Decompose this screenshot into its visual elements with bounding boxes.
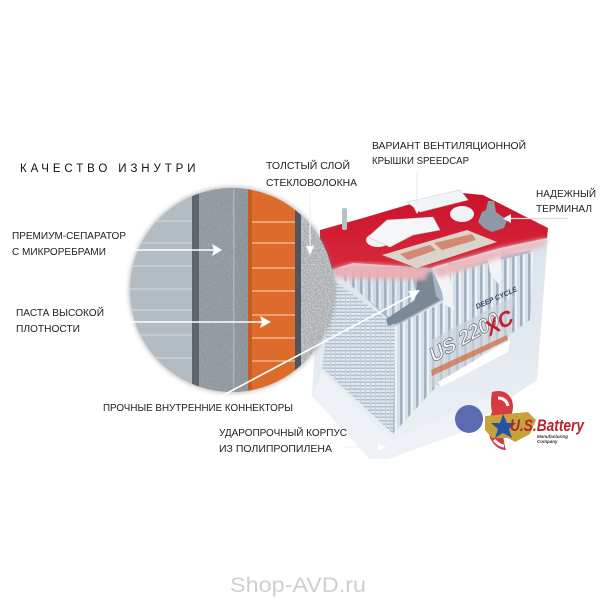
vent cap SpeedCap	[366, 190, 474, 247]
callout: case	[219, 426, 386, 455]
callout: paste: ПАСТА ВЫСОКОЙ	[16, 306, 104, 319]
side cell plates	[322, 280, 395, 434]
US Battery logo	[455, 391, 585, 450]
callout: paste: ПЛОТНОСТИ	[16, 323, 80, 335]
callout: connectors: ПРОЧНЫЕ ВНУТРЕННИЕ КОННЕКТОРЫ	[103, 402, 293, 414]
title: КАЧЕСТВО ИЗНУТРИ	[20, 163, 199, 175]
battery illustration	[312, 190, 585, 459]
left plate layer	[130, 188, 192, 392]
US Battery logo: Manufacturing	[537, 434, 568, 439]
US Battery logo: U.S.Battery	[510, 417, 585, 435]
terminal	[478, 201, 507, 232]
callout: fiberglass: ТОЛСТЫЙ СЛОЙ	[266, 159, 350, 172]
callout: vent cap: ВАРИАНТ ВЕНТИЛЯЦИОННОЙ	[372, 139, 526, 152]
callout: vent cap: КРЫШКИ SPEEDCAP	[372, 155, 469, 167]
callout: case: ИЗ ПОЛИПРОПИЛЕНА	[219, 443, 332, 455]
callout: connectors	[103, 290, 420, 414]
front cell plates	[393, 258, 533, 434]
battery label: DEEP CYCLE	[475, 286, 519, 311]
top of cells	[333, 250, 533, 326]
connector strap	[386, 272, 440, 326]
callout: fiberglass: СТЕКЛОВОЛОКНА	[266, 177, 357, 189]
orange paste layer	[248, 188, 295, 392]
callout: separator	[12, 230, 222, 258]
battery case	[312, 235, 548, 459]
callout: terminal: ТЕРМИНАЛ	[536, 203, 592, 215]
magnified cross-section circle	[129, 187, 337, 393]
white straps	[432, 262, 454, 310]
base band	[312, 372, 507, 459]
battery label	[428, 286, 519, 388]
battery label: US 2200	[428, 308, 502, 368]
watermark: Shop-AVD.ru	[230, 574, 366, 597]
separator layer	[192, 188, 248, 392]
callout: terminal: НАДЕЖНЫЙ	[536, 187, 596, 200]
battery label: XC	[483, 305, 516, 342]
fiberglass layer	[295, 210, 334, 370]
callout: paste	[16, 306, 271, 335]
red lid	[320, 193, 548, 270]
callout: separator: С МИКРОРЕБРАМИ	[12, 246, 106, 258]
callout: vent cap	[372, 139, 526, 214]
caution plate on lid	[382, 230, 497, 268]
US Battery logo: Company	[537, 439, 558, 444]
callout: separator: ПРЕМИУМ-СЕПАРАТОР	[12, 230, 126, 242]
callout: fiberglass	[266, 159, 357, 255]
callout: case: УДАРОПРОЧНЫЙ КОРПУС	[219, 426, 347, 439]
callout: terminal	[503, 187, 596, 223]
rear post	[342, 208, 347, 230]
